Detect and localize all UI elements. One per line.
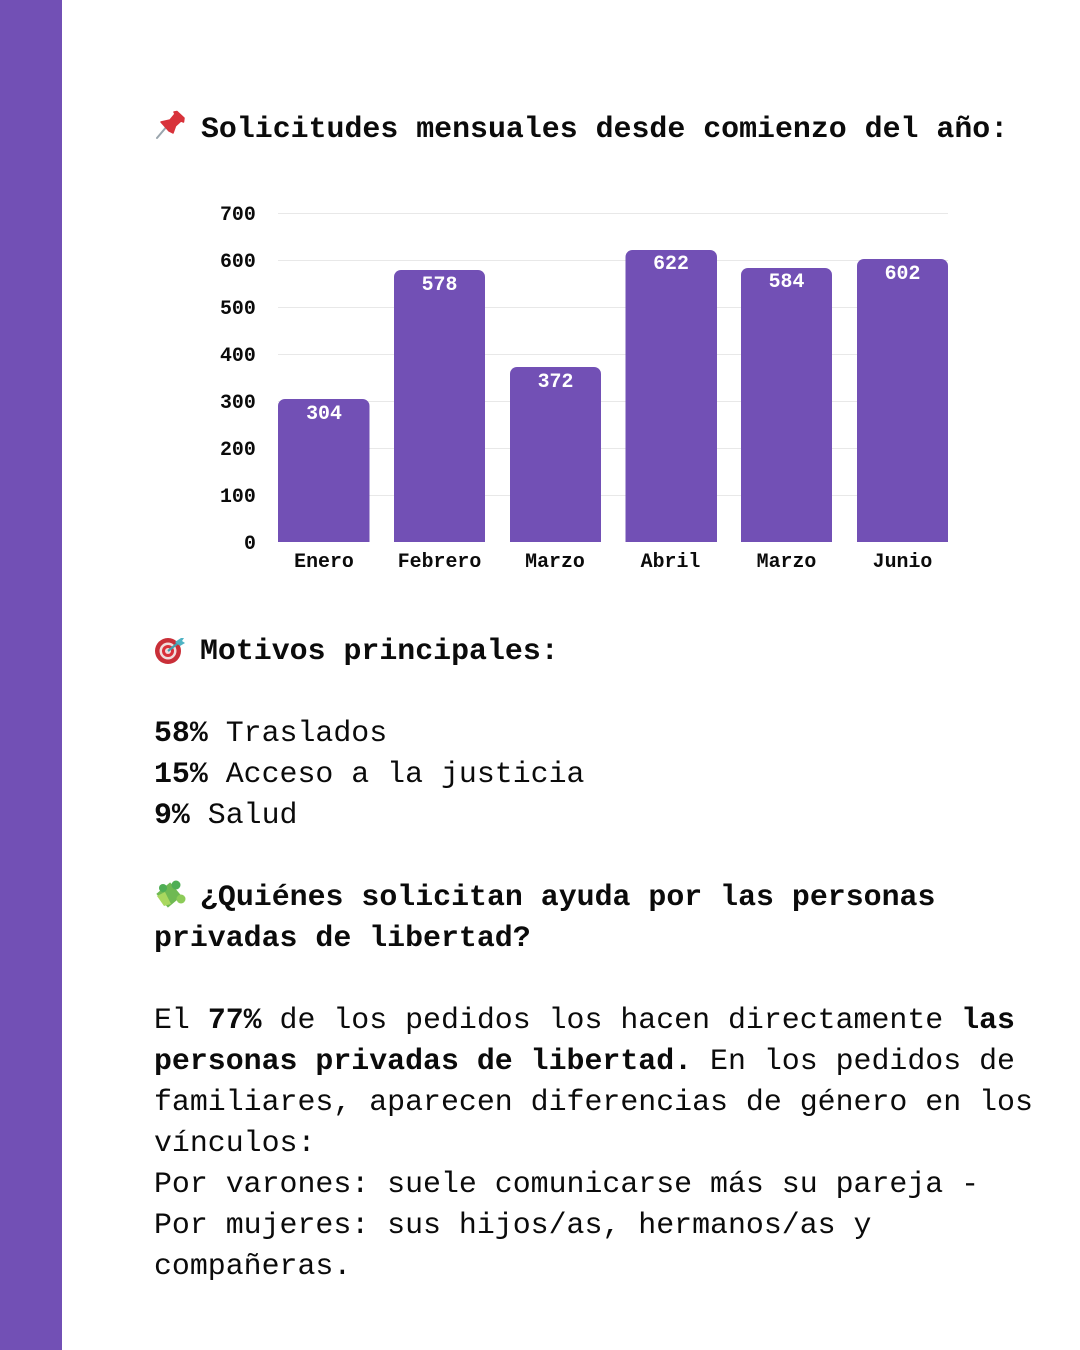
heading: who requests help: [154, 880, 935, 955]
bar: Junio 602: 602: [885, 262, 920, 285]
y axis labels: 200: [220, 438, 256, 461]
icon: dart target: [155, 638, 185, 664]
bar: Marzo 372: Marzo: [525, 550, 585, 573]
paragraph: who requests help: Por varones: suele comunicarse más su pareja -: [154, 1167, 979, 1201]
bar: Enero 304: 304: [306, 402, 342, 425]
bar: Marzo 584: 584: [769, 270, 804, 293]
bar: Abril 622: 622: [653, 252, 689, 275]
bar: Marzo 584: [741, 268, 832, 573]
bar: Febrero 578: 578: [422, 273, 457, 296]
bar: Enero 304: Enero: [294, 550, 354, 573]
y axis labels: [220, 203, 256, 555]
bar: Marzo 372: [510, 367, 601, 573]
y axis labels: 500: [220, 297, 256, 320]
heading: who requests help: ¿Quiénes solicitan ayuda por las personas: [200, 880, 935, 914]
bar: Junio 602: [857, 259, 948, 573]
y axis labels: 400: [220, 344, 256, 367]
paragraph: who requests help: personas privadas de libertad. En los pedidos de: [154, 1044, 1015, 1078]
paragraph: who requests help: Por mujeres: sus hijos/as, hermanos/as y: [154, 1208, 872, 1242]
y axis labels: 300: [220, 391, 256, 414]
paragraph: who requests help: vínculos:: [154, 1126, 315, 1160]
sidebar: purple band: [0, 0, 62, 1350]
y axis labels: 600: [220, 250, 256, 273]
bar: Marzo 372: 372: [538, 370, 573, 393]
bar chart: monthly requests: [220, 203, 948, 573]
heading: who requests help: privadas de libertad?: [154, 921, 531, 955]
bar: Abril 622: Abril: [641, 550, 700, 573]
list: reasons: [154, 716, 584, 832]
bar: Febrero 578: Febrero: [398, 550, 481, 573]
list: reasons: 15% Acceso a la justicia: [154, 757, 584, 791]
bar: Febrero 578: [394, 270, 485, 573]
list: reasons: 58% Traslados: [154, 716, 387, 750]
paragraph: who requests help: [154, 1003, 1033, 1283]
paragraph: who requests help: familiares, aparecen diferencias de género en los: [154, 1085, 1033, 1119]
bar: Enero 304: [278, 399, 370, 573]
paragraph: who requests help: El 77% de los pedidos los hacen directamente las: [154, 1003, 1015, 1037]
y axis labels: 100: [220, 485, 256, 508]
bar: Junio 602: Junio: [873, 550, 932, 573]
bar: Abril 622: [626, 250, 717, 573]
icon: puzzle piece: [156, 880, 186, 908]
icon: pushpin: [157, 112, 184, 138]
y axis labels: 0: [244, 532, 256, 555]
heading: monthly requests: Solicitudes mensuales desde comienzo del año:: [201, 112, 1008, 146]
heading: main reasons: Motivos principales:: [200, 634, 559, 668]
bar: Marzo 584: Marzo: [757, 550, 816, 573]
y axis labels: 700: [220, 203, 256, 226]
paragraph: who requests help: compañeras.: [154, 1249, 351, 1283]
list: reasons: 9% Salud: [154, 798, 298, 832]
